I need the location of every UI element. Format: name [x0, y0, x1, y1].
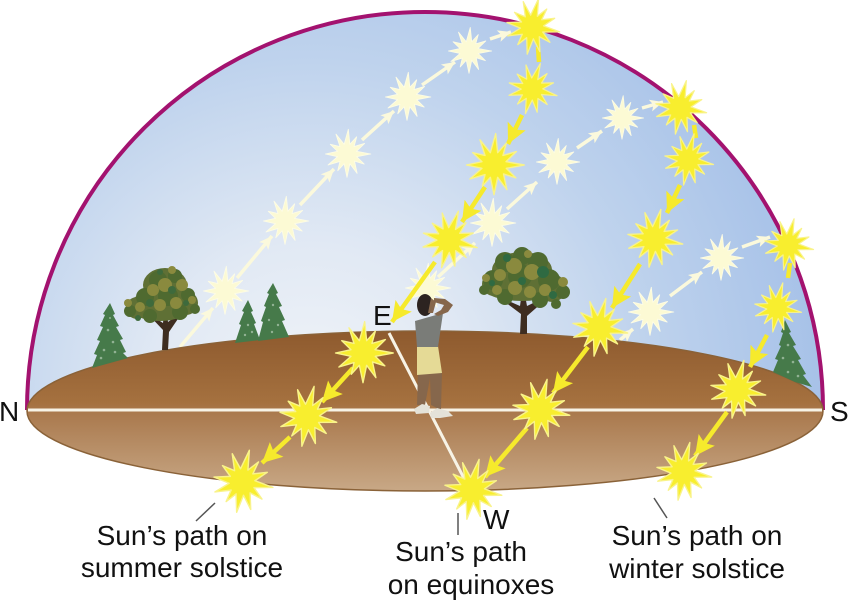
sky dome [27, 12, 823, 410]
person [414, 294, 453, 418]
leader: summer [196, 503, 215, 521]
yellow sun paths with arrows [262, 47, 790, 477]
label: S: S [830, 396, 849, 427]
equinox pale suns [405, 263, 451, 311]
east-west line [389, 333, 470, 490]
leader: equinox [457, 513, 459, 535]
caption: equinoxes: on equinoxes [388, 569, 554, 600]
equinox yellow suns [440, 76, 718, 524]
summer arrows [538, 47, 539, 62]
label: W: W [483, 504, 510, 535]
summer pale suns [203, 266, 249, 314]
dome outline [27, 12, 823, 410]
equinox arrows [694, 125, 696, 138]
caption: winter solstice: winter solstice [608, 553, 785, 584]
pale arrows [180, 32, 770, 347]
summer solstice yellow suns [209, 0, 565, 518]
pale sun arcs above the horizon [180, 27, 770, 347]
tree: right [479, 247, 570, 334]
winter arrows [788, 263, 790, 278]
conifer: far left [92, 303, 128, 368]
north-south line [28, 408, 822, 412]
conifer: right [773, 320, 812, 387]
winter solstice yellow suns [652, 214, 818, 505]
caption: summer solstice: summer solstice [81, 552, 283, 583]
tree: left [124, 266, 200, 350]
label: E: E [373, 300, 392, 331]
caption: equinoxes: Sun’s path [395, 536, 527, 567]
caption: winter solstice: Sun’s path on [612, 520, 782, 551]
caption: summer solstice: Sun’s path on [97, 520, 267, 551]
leader: winter [654, 498, 667, 518]
ground disc [27, 331, 823, 491]
conifer: pair centre-left [235, 283, 289, 343]
winter pale suns [628, 287, 674, 335]
